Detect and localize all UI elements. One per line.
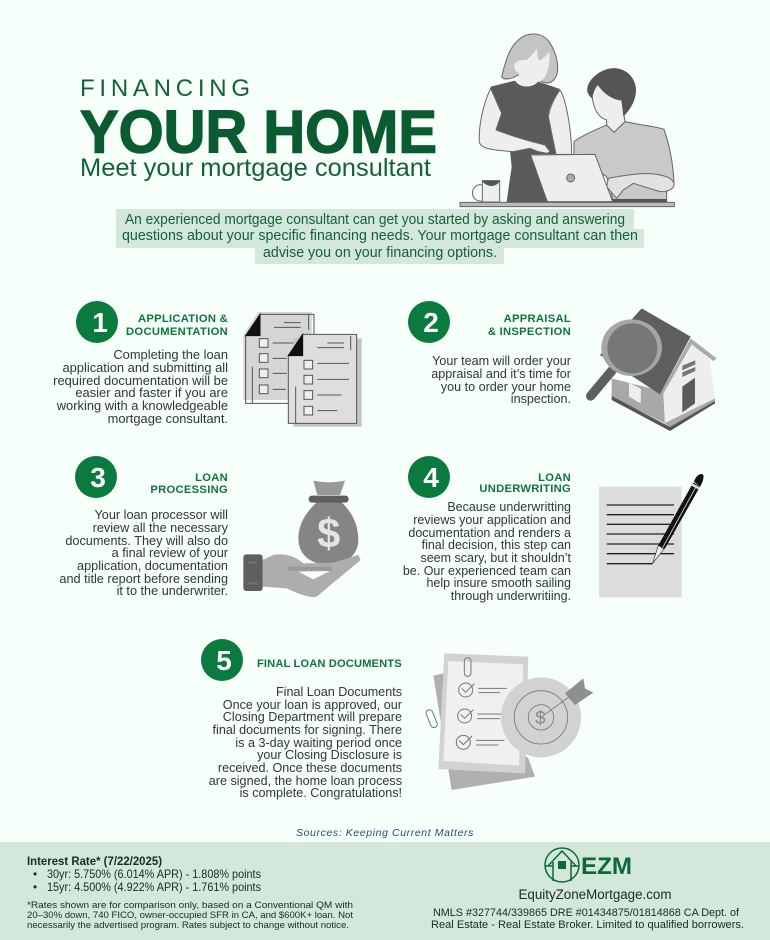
interest rates: Interest Rate* (7/22/2025) [27,854,162,868]
step 3 heading [150,472,228,496]
step 5 heading: FINAL LOAN DOCUMENTS [257,658,402,670]
step 5 body: is a 3-day waiting period once [235,736,402,750]
step 2 body: you to order your home [441,380,571,394]
step 5: final loan documents [201,639,593,800]
step 4 body: help insure smooth sailing [426,576,571,590]
intro text with highlight: questions about your specific financing needs. Your mortgage consultant can then [122,228,638,244]
step 1 body: easier and faster if you are [75,385,228,400]
step 1 body: application and submitting all [62,360,228,375]
step 5 body: final documents for signing. There [213,723,402,737]
step 1 body: working with a knowledgeable [56,398,228,413]
licensing text: NMLS #327744/339865 DRE #01434875/01814868 CA Dept. of [433,907,740,919]
step 3 body: application, documentation [77,559,228,573]
step 3 badge [75,456,117,498]
step 1 body: required documentation will be [53,373,228,388]
interest rates: • [33,880,37,894]
icon: hand holding money bag: $ [317,509,340,556]
step 4 body: documentation and renders a [408,526,571,540]
intro text with highlight [116,209,644,264]
website: EquityZoneMortgage.com [518,887,672,902]
step 4 badge [408,456,450,498]
icon: checklist documents [243,312,362,427]
logo: EZM [545,848,632,882]
step 3 body: documents. They will also do [65,534,228,548]
step 5 body: received. Once these documents [218,761,402,775]
step 4 heading: LOAN [538,472,571,484]
icon: checklist with dollar target [425,653,593,790]
step 4 heading [479,472,571,495]
step 1 heading: DOCUMENTATION [126,326,228,338]
sources line: Sources: Keeping Current Matters [296,827,474,839]
rate disclaimer: 20–30% down, 740 FICO, owner-occupied SFR in CA, and $600K+ loan. Not [27,909,353,920]
intro text with highlight: advise you on your financing options. [263,245,497,261]
rate disclaimer: necessarily the advertised program. Rates subject to change without notice. [27,919,349,930]
step 3 body: review all the necessary [93,521,229,535]
rate disclaimer [27,899,353,930]
step 5 body [209,685,402,800]
step 1 body [53,347,228,426]
step 2: appraisal and inspection [408,301,717,431]
step 4 body: seem scary, but it shouldn’t [420,551,572,565]
illustration: two people at a laptop [460,34,674,207]
icon: hand holding money bag [243,481,361,597]
step 4 body: be. Our experienced team can [403,564,571,578]
step 2 body: inspection. [511,392,571,406]
step 2 heading: & INSPECTION [488,326,571,338]
step 3 body [59,508,229,598]
step 1 badge: 1 [92,307,108,338]
step 3 body: a final review of your [112,546,229,560]
step 5 body: is complete. Congratulations! [240,786,402,800]
step 4 body: Because underwritting [447,500,571,514]
step 5 body: your Closing Disclosure is [257,748,402,762]
step 3 heading: PROCESSING [150,484,228,496]
title [80,75,437,182]
step 4 body: final decision, this step can [422,538,571,552]
logo: EZM: EZM [581,853,632,880]
icon: checklist with dollar target: $ [535,707,546,728]
step 2 heading [488,313,571,338]
title: YOUR HOME [80,98,437,166]
title: FINANCING [80,75,250,102]
icon: pen signing paper [599,474,704,597]
step 5 badge [201,639,243,681]
icon: magnifier over house [591,308,717,431]
step 5 body: Closing Department will prepare [223,710,402,724]
step 1 heading: APPLICATION & [138,313,228,325]
step 5 body: are signed, the home loan process [209,774,402,788]
step 2 badge: 2 [423,307,439,338]
step 4 body: reviews your application and [413,513,571,527]
step 3 badge: 3 [90,462,106,493]
step 4 heading: UNDERWRITING [479,483,571,495]
step 1 badge [76,301,118,343]
licensing text [431,907,744,931]
step 1 body: mortgage consultant. [108,411,228,426]
interest rates [27,854,261,894]
step 3 body: it to the underwriter. [117,584,228,598]
step 2 body: appraisal and it’s time for [431,367,571,381]
step 5 body: Final Loan Documents [276,685,402,699]
step 4 body: through underwritiing. [451,589,571,603]
step 3 body: and title report before sending [59,572,228,586]
interest rates: 15yr: 4.500% (4.922% APR) - 1.761% points [47,880,261,894]
step 4 body [403,500,572,603]
step 2 body [431,354,571,406]
step 4 badge: 4 [423,462,439,493]
interest rates: 30yr: 5.750% (6.014% APR) - 1.808% points [47,867,261,881]
step 5 body: Once your loan is approved, our [223,698,402,712]
title: Meet your mortgage consultant [80,154,431,182]
step 1 heading [126,313,228,338]
interest rates: • [33,867,37,881]
step 1 body: Completing the loan [113,347,228,362]
step 2 badge [408,301,450,343]
step 4: loan underwriting [403,456,704,603]
rate disclaimer: *Rates shown are for comparison only, based on a Conventional QM with [27,899,353,910]
footer band [0,842,770,940]
intro text with highlight: An experienced mortgage consultant can get you started by asking and answering [125,212,625,228]
step 3 heading: LOAN [195,472,228,484]
step 3: loan processing [59,456,361,598]
step 3 body: Your loan processor will [94,508,228,522]
step 2 body: Your team will order your [432,354,571,368]
licensing text: Real Estate - Real Estate Broker. Limited to qualified borrowers. [431,919,744,931]
step 1: application and documentation [53,301,362,427]
step 2 heading: APPRAISAL [504,313,571,325]
step 5 badge: 5 [216,645,232,676]
